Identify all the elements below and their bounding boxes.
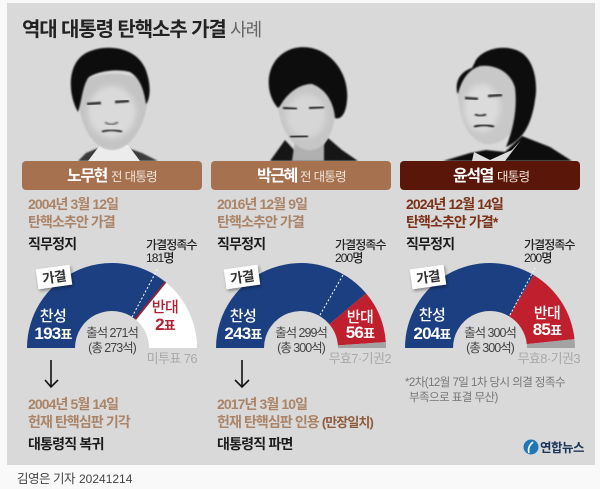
quorum label: Park: 200명 <box>335 251 362 265</box>
dates: Park vote: 직무정지 <box>217 236 265 252</box>
chart: Park vote semicircle: 출석 299석 <box>275 326 327 340</box>
chart: Yoon vote semicircle <box>405 263 580 366</box>
chart: Yoon vote semicircle: 찬성 <box>419 307 445 324</box>
dates: Roh vote: 직무정지 <box>28 236 76 252</box>
dates: Roh vote <box>28 196 118 252</box>
footnote: *2차(12월 7일 1차 당시 의결 정족수 <box>405 375 565 389</box>
chart: Yoon vote semicircle: 204표 <box>413 324 451 343</box>
dates: Yoon vote: 탄핵소추안 가결* <box>406 214 499 230</box>
outcome: Park: 대통령직 파면 <box>217 436 293 452</box>
dates: Roh vote: 탄핵소추안 가결 <box>28 214 115 230</box>
badge: Yoon passed <box>410 265 446 289</box>
footnote <box>405 375 565 404</box>
quorum label: Park: 가결정족수 <box>335 238 387 252</box>
name bar: Park: 박근혜 <box>257 167 298 185</box>
chart: Park vote semicircle: 반대 <box>347 309 373 326</box>
dates: Roh vote: 2004년 3월 12일 <box>28 196 118 212</box>
title: 역대 대통령 탄핵소추 가결 사례 <box>22 18 261 41</box>
dates: Yoon vote <box>406 196 503 252</box>
chart: Park vote semicircle <box>216 263 391 366</box>
chart: Yoon vote semicircle: 85표 <box>533 320 562 339</box>
name bar: Yoon: 대통령 <box>497 170 529 184</box>
chart: Roh vote semicircle: 찬성 <box>40 308 66 325</box>
portrait: Roh Moo-hyun <box>71 48 158 161</box>
outcome: Park: 헌재 탄핵심판 인용 (만장일치) <box>217 414 373 430</box>
chart: Yoon vote semicircle: 출석 300석 <box>464 326 516 340</box>
chart: Yoon vote semicircle: 무효8·기권3 <box>518 351 580 366</box>
chart: Park vote semicircle: 무효7·기권2 <box>329 351 391 366</box>
outcome: Roh: 헌재 탄핵심판 기각 <box>28 414 131 430</box>
dates: Park vote: 탄핵소추안 가결 <box>217 214 304 230</box>
chart: Park vote semicircle: 243표 <box>224 324 262 343</box>
badge: Yoon passed: 가결 <box>415 268 441 287</box>
arrow: Park outcome <box>235 360 249 387</box>
chart: Roh vote semicircle: 출석 271석 <box>86 326 138 340</box>
name bar: Roh: 전 대통령 <box>111 170 157 184</box>
quorum label: Roh <box>146 238 198 265</box>
arrow: Roh outcome <box>45 360 58 387</box>
name bar: Roh <box>22 161 202 190</box>
badge: Roh passed: 가결 <box>41 268 67 287</box>
chart: Roh vote semicircle <box>27 263 197 366</box>
name bar: Park: 전 대통령 <box>300 170 346 184</box>
outcome: Park: 2017년 3월 10일 <box>217 396 307 412</box>
outcome: Roh: 대통령직 복귀 <box>28 436 104 452</box>
badge: Roh passed <box>36 265 72 289</box>
quorum label: Yoon: 200명 <box>524 251 551 265</box>
quorum label: Roh: 가결정족수 <box>146 238 198 252</box>
dates: Yoon vote: 직무정지 <box>406 236 454 252</box>
name bar: Yoon <box>400 161 580 190</box>
chart: Roh vote semicircle: 반대 <box>152 299 178 316</box>
name bar: Roh: 노무현 <box>67 167 108 185</box>
footnote: 부족으로 표결 무산) <box>409 391 499 404</box>
chart: Park vote semicircle: (총 300석) <box>277 341 326 355</box>
chart: Roh vote semicircle: (총 273석) <box>88 341 137 355</box>
chart: Roh vote semicircle: 미투표 76 <box>147 351 197 366</box>
outcome: Roh: 2004년 5월 14일 <box>28 396 118 412</box>
logo: Yonhap News: 연합뉴스 <box>540 440 584 455</box>
credit line: 20241214 <box>79 472 133 486</box>
dates: Yoon vote: 2024년 12월 14일 <box>406 196 503 212</box>
credit line <box>17 472 133 486</box>
portrait: Yoon Suk-yeol <box>443 48 572 161</box>
chart: Yoon vote semicircle: 반대 <box>534 305 560 322</box>
dates: Park vote <box>217 196 307 252</box>
chart: Park vote semicircle: 56표 <box>346 323 375 342</box>
name bar: Park <box>211 161 391 190</box>
dates: Park vote: 2016년 12월 9일 <box>217 196 307 212</box>
outcome: Roh <box>28 396 131 452</box>
chart: Roh vote semicircle: 193표 <box>34 324 72 343</box>
logo: Yonhap News <box>524 440 584 455</box>
portrait: Park Geun-hye <box>269 47 358 161</box>
chart: Park vote semicircle: 찬성 <box>230 308 256 325</box>
badge: Park passed: 가결 <box>229 268 255 287</box>
name bar: Yoon: 윤석열 <box>453 167 494 185</box>
quorum label: Park <box>335 238 387 265</box>
quorum label: Yoon: 가결정족수 <box>524 238 576 252</box>
badge: Park passed <box>224 265 260 289</box>
outcome: Park <box>217 396 373 452</box>
credit line: 김영은 기자 <box>17 472 76 486</box>
chart: Roh vote semicircle: 2표 <box>155 315 176 334</box>
quorum label: Yoon <box>524 238 576 265</box>
chart: Yoon vote semicircle: (총 300석) <box>466 341 515 355</box>
quorum label: Roh: 181명 <box>146 251 173 265</box>
